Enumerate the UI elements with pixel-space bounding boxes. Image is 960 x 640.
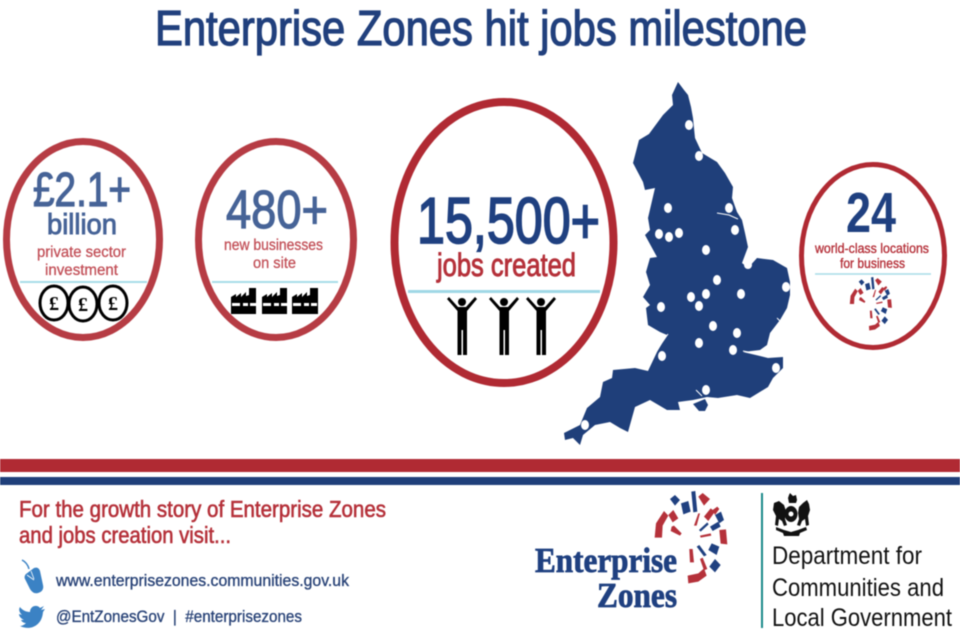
title: Enterprise Zones hit jobs milestone xyxy=(155,1,807,56)
logo wordmark: Zones xyxy=(597,576,677,615)
investment label: private sector xyxy=(37,244,127,261)
location dots xyxy=(581,120,790,430)
estuaries xyxy=(659,213,781,396)
businesses label: on site xyxy=(253,255,296,272)
investment label xyxy=(37,244,127,279)
locations label: world-class locations xyxy=(814,240,929,256)
divider stripes xyxy=(0,459,960,485)
investment figure: £2.1+ xyxy=(33,164,131,217)
icon: pound coins: £ xyxy=(108,293,118,315)
circle outline: investment xyxy=(6,142,160,338)
social handles: @EntZonesGov | #enterprisezones xyxy=(56,608,302,626)
locations figure: 24 xyxy=(846,181,896,245)
Isle of Wight xyxy=(693,399,708,411)
logo wordmark xyxy=(535,541,677,615)
map outline xyxy=(564,82,790,445)
icon: factories xyxy=(231,288,318,314)
logo wordmark: Enterprise xyxy=(535,541,677,580)
jobs label: jobs created xyxy=(436,247,576,283)
icon: twitter bird xyxy=(19,606,45,628)
icon: pound coins: £ xyxy=(78,294,88,316)
businesses figure: 480+ xyxy=(226,180,328,240)
circle outline: locations xyxy=(802,164,944,348)
icon: pound coins: £ xyxy=(49,293,59,315)
map of England xyxy=(564,82,790,445)
panel: jobs circle xyxy=(394,102,614,383)
website link: www.enterprisezones.communities.gov.uk xyxy=(55,572,350,590)
footer call to action: For the growth story of Enterprise Zones xyxy=(19,496,386,522)
footer call to action: and jobs creation visit... xyxy=(19,522,231,548)
icon: people with raised arms xyxy=(447,297,556,355)
department name: Department for xyxy=(772,542,922,570)
icon: royal coat of arms xyxy=(773,493,810,536)
investment unit: billion xyxy=(47,209,117,241)
locations label xyxy=(814,240,929,271)
logo mark xyxy=(655,491,727,583)
circle outline: jobs xyxy=(394,102,614,383)
panel: businesses circle xyxy=(198,142,354,338)
businesses label: new businesses xyxy=(224,237,323,254)
panel: locations circle xyxy=(802,164,944,348)
locations label: for business xyxy=(840,255,905,271)
icon: pound coins xyxy=(40,286,127,321)
investment label: investment xyxy=(45,262,119,279)
icon: small Enterprise Zones mark xyxy=(850,277,892,330)
logo: Enterprise Zones xyxy=(535,491,727,615)
footer call to action xyxy=(19,496,386,548)
businesses label xyxy=(224,237,323,272)
icon: computer mouse xyxy=(22,560,43,593)
panel: investment circle xyxy=(6,142,160,338)
jobs figure: 15,500+ xyxy=(417,184,600,257)
circle outline: businesses xyxy=(198,142,354,338)
department name xyxy=(772,542,952,632)
